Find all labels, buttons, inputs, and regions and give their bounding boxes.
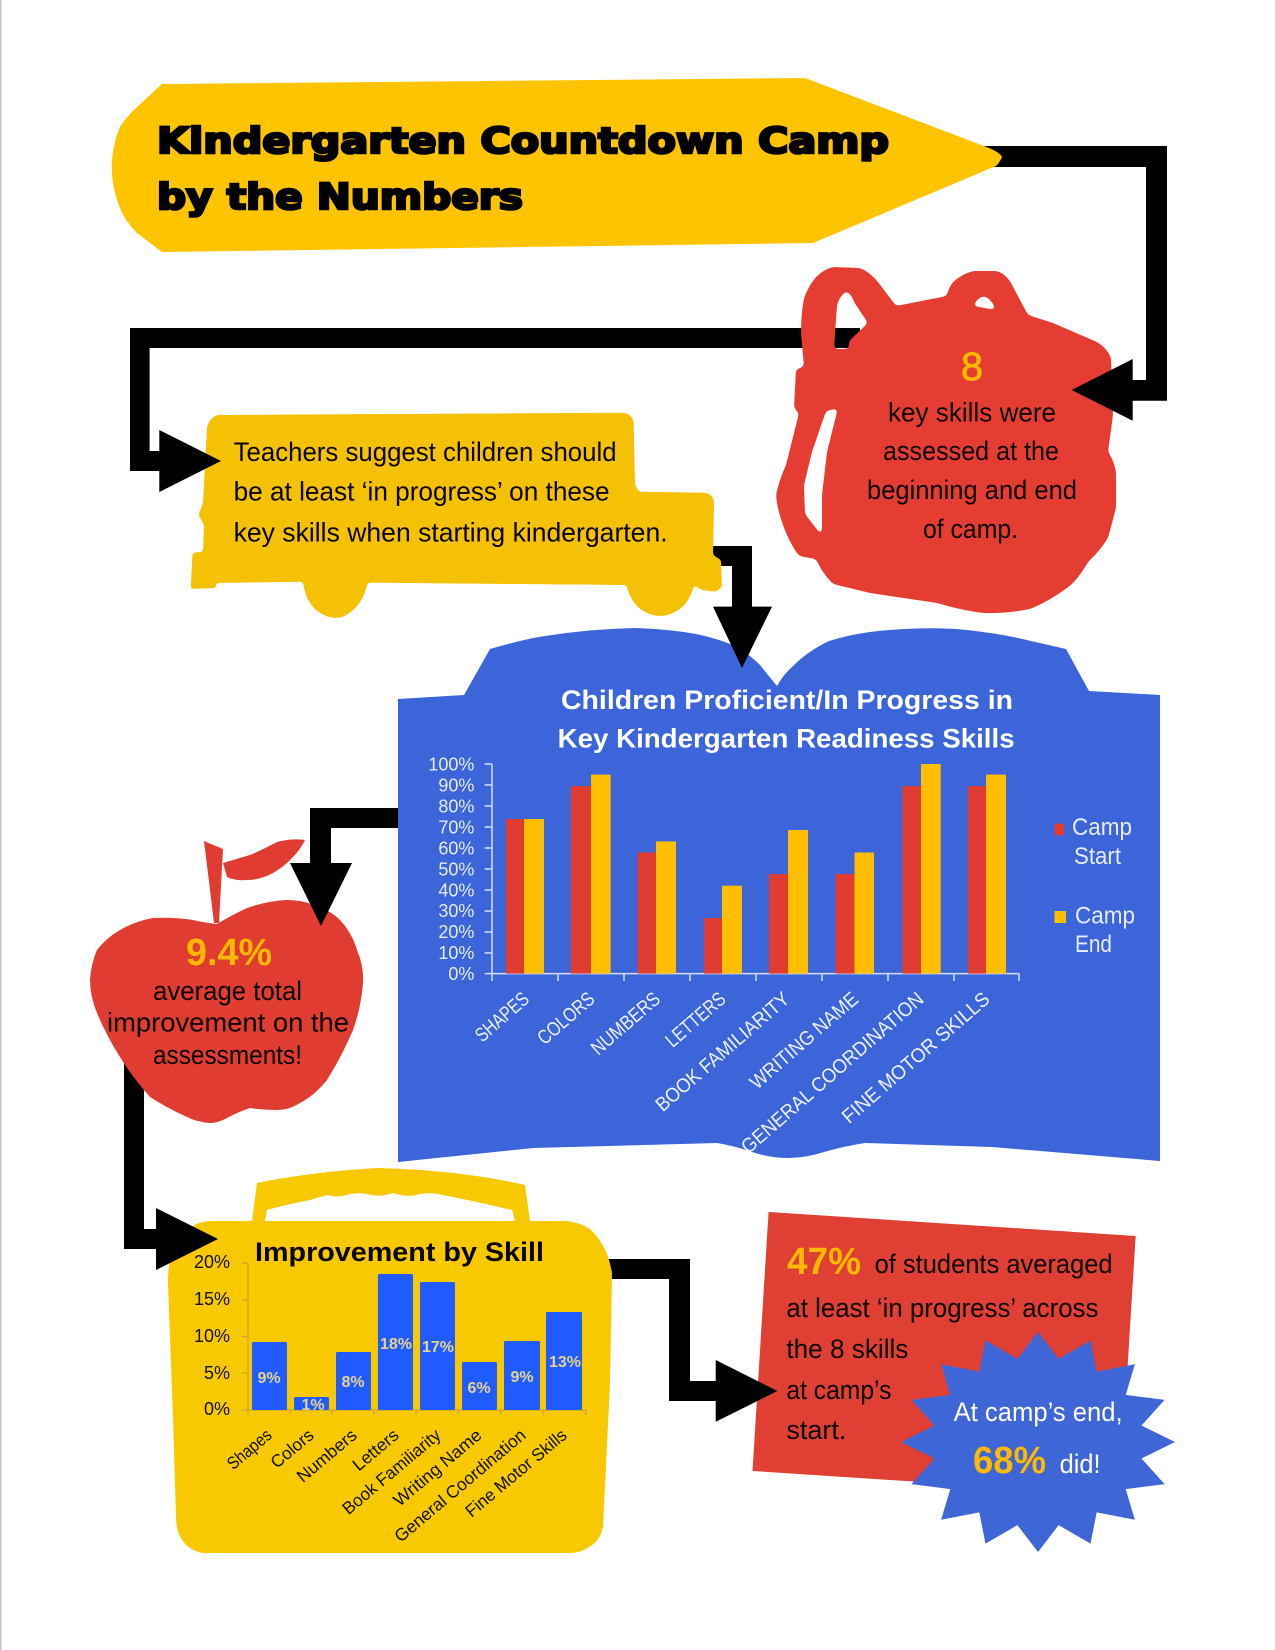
bar chart: improvement by skill: 18% bbox=[380, 1336, 412, 1353]
bar chart: improvement by skill: Colors bbox=[266, 1425, 318, 1472]
panel: pencil title banner bbox=[112, 78, 1002, 252]
panel: backpack 8 key skills: key skills were bbox=[888, 398, 1056, 428]
panel: school bus text: be at least ‘in progress’ on these bbox=[234, 477, 610, 507]
bar chart: camp start vs camp end: LETTERS bbox=[662, 988, 730, 1052]
bar chart: improvement by skill: 15% bbox=[194, 1289, 230, 1309]
bar chart: improvement by skill bbox=[194, 1252, 586, 1546]
panel: backpack 8 key skills: 8 bbox=[961, 345, 983, 389]
panel: apple improvement callout bbox=[90, 839, 363, 1123]
arrow: lunchbox to red card bbox=[600, 1259, 778, 1422]
panel: backpack 8 key skills: of camp. bbox=[923, 514, 1018, 544]
chart legend: End bbox=[1075, 931, 1112, 958]
bar chart: improvement by skill: 8% bbox=[341, 1374, 365, 1391]
icon: apple stem bbox=[204, 841, 223, 923]
arrow: backpack to bus bbox=[130, 328, 860, 492]
bar chart: camp start vs camp end: GENERAL COORDINATION bbox=[737, 988, 928, 1158]
panel: starburst 68 percent callout: At camp’s end, bbox=[954, 1397, 1123, 1427]
bar chart: improvement by skill: Shapes bbox=[223, 1425, 276, 1473]
bar chart: camp start vs camp end: COLORS bbox=[534, 988, 599, 1049]
chart legend: Camp bbox=[1072, 814, 1132, 841]
bar chart: camp start vs camp end: 70% bbox=[438, 818, 474, 838]
bar chart: improvement by skill: 1% bbox=[301, 1397, 325, 1414]
panel: school bus text: key skills when starting kindergarten. bbox=[234, 518, 668, 548]
panel: school bus text: Teachers suggest children should bbox=[234, 437, 617, 467]
bar chart: improvement by skill: Book Familiarity bbox=[338, 1425, 445, 1518]
bar chart: camp start vs camp end: WRITING NAME bbox=[746, 988, 863, 1094]
panel: starburst 68 percent callout: did! bbox=[1060, 1449, 1101, 1479]
lunchbox chart title: Improvement by Skill bbox=[255, 1237, 544, 1267]
bar chart: camp start vs camp end: SHAPES bbox=[471, 988, 534, 1047]
bar chart: improvement by skill: Numbers bbox=[293, 1425, 361, 1486]
bar chart: camp start vs camp end: NUMBERS bbox=[587, 988, 665, 1060]
bar chart: improvement by skill: Writing Name bbox=[389, 1425, 486, 1510]
arrow: title to backpack bbox=[960, 146, 1167, 421]
chart legend bbox=[1054, 814, 1135, 958]
bar chart: improvement by skill: 5% bbox=[204, 1363, 230, 1383]
bar chart: camp start vs camp end bbox=[428, 754, 1019, 1158]
title: by the Numbers bbox=[157, 177, 523, 218]
panel: school bus text bbox=[191, 413, 722, 618]
panel: starburst 68 percent callout: 68% bbox=[973, 1440, 1046, 1482]
bar chart: improvement by skill: 9% bbox=[510, 1369, 534, 1386]
bar chart: camp start vs camp end: 20% bbox=[438, 922, 474, 942]
chart legend: Start bbox=[1074, 843, 1121, 870]
bar chart: improvement by skill: 0% bbox=[204, 1399, 230, 1419]
title bbox=[157, 121, 889, 218]
panel: backpack 8 key skills: beginning and end bbox=[867, 475, 1077, 505]
panel: apple improvement callout: improvement on the bbox=[107, 1008, 349, 1038]
panel: starburst 68 percent callout bbox=[901, 1332, 1175, 1552]
chart title: Key Kindergarten Readiness Skills bbox=[558, 724, 1015, 754]
bar chart: camp start vs camp end: 60% bbox=[438, 838, 474, 858]
panel: open book chart bbox=[398, 628, 1160, 1162]
icon: apple leaf bbox=[223, 839, 305, 880]
panel: backpack 8 key skills: assessed at the bbox=[883, 436, 1059, 466]
bar chart: camp start vs camp end: BOOK FAMILIARITY bbox=[652, 988, 794, 1116]
bar chart: improvement by skill: 13% bbox=[549, 1354, 581, 1371]
bar chart: camp start vs camp end: 10% bbox=[438, 943, 474, 963]
bar chart: camp start vs camp end: 90% bbox=[438, 776, 474, 796]
panel: apple improvement callout: average total bbox=[153, 976, 302, 1006]
bar chart: improvement by skill: Letters bbox=[348, 1425, 403, 1475]
bar chart: improvement by skill: 6% bbox=[467, 1380, 491, 1397]
panel: 47 percent red card bbox=[752, 1212, 1136, 1495]
bar chart: camp start vs camp end: FINE MOTOR SKILLS bbox=[838, 988, 994, 1128]
panel: apple improvement callout: assessments! bbox=[153, 1040, 302, 1070]
bar chart: improvement by skill: 17% bbox=[422, 1339, 454, 1356]
arrow: book to apple bbox=[290, 808, 398, 926]
bar chart: camp start vs camp end: 30% bbox=[438, 901, 474, 921]
panel: backpack 8 key skills bbox=[776, 267, 1116, 613]
panel: 47 percent red card: at camp’s bbox=[786, 1375, 891, 1405]
panel: 47 percent red card: 47% bbox=[787, 1241, 861, 1283]
panel: apple improvement callout: 9.4% bbox=[186, 932, 272, 974]
icon: apple body bbox=[90, 900, 363, 1123]
panel: 47 percent red card: at least ‘in progress’ across bbox=[786, 1293, 1098, 1323]
bar chart: improvement by skill: 20% bbox=[194, 1252, 230, 1272]
bar chart: camp start vs camp end: 100% bbox=[428, 754, 474, 774]
title: Kindergarten Countdown Camp bbox=[157, 121, 889, 162]
panel: 47 percent red card: of students averaged bbox=[875, 1249, 1113, 1279]
panel: 47 percent red card: the 8 skills bbox=[786, 1334, 908, 1364]
chart legend: Camp bbox=[1075, 903, 1135, 930]
bar chart: improvement by skill: 9% bbox=[257, 1370, 281, 1387]
arrow: bus to book bbox=[700, 546, 772, 668]
bar chart: improvement by skill: Fine Motor Skills bbox=[461, 1425, 571, 1521]
arrow: apple to lunchbox bbox=[124, 1050, 218, 1270]
chart title: Children Proficient/In Progress in bbox=[561, 685, 1013, 715]
panel: lunchbox improvement chart bbox=[168, 1168, 612, 1553]
panel: 47 percent red card: start. bbox=[786, 1415, 846, 1445]
bar chart: improvement by skill: General Coordination bbox=[390, 1425, 530, 1546]
bar chart: camp start vs camp end: 40% bbox=[438, 880, 474, 900]
bar chart: camp start vs camp end: 80% bbox=[438, 796, 474, 816]
bar chart: camp start vs camp end: 0% bbox=[448, 964, 474, 984]
bar chart: camp start vs camp end: 50% bbox=[438, 860, 474, 880]
bar chart: improvement by skill: 10% bbox=[194, 1326, 230, 1346]
chart title bbox=[558, 685, 1015, 754]
